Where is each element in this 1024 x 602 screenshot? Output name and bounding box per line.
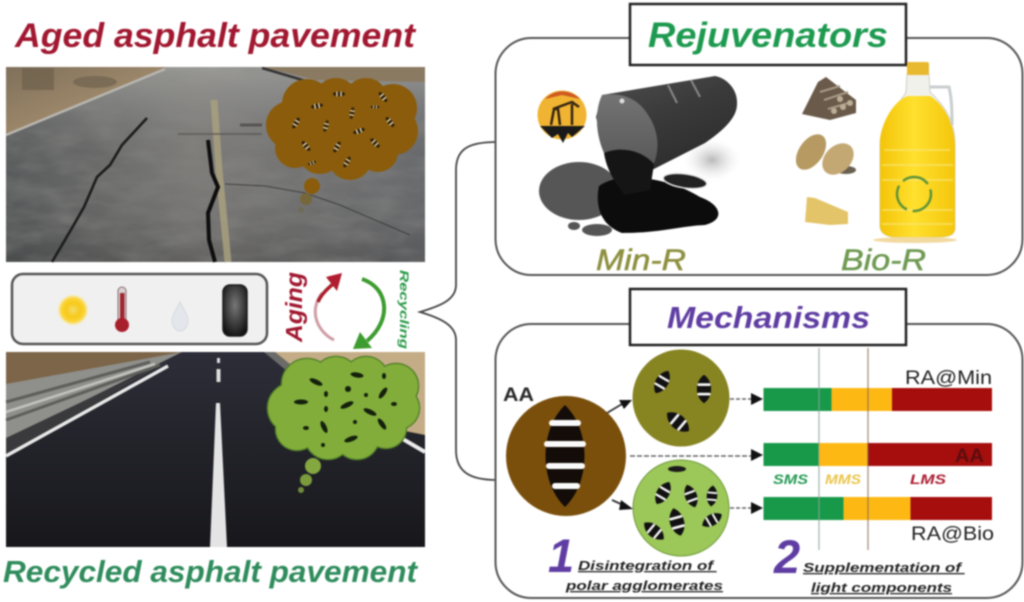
bar: RA@Min <box>764 388 992 411</box>
icon: thermometer <box>115 287 129 332</box>
bracket connector <box>420 142 497 480</box>
label: Bio-R: Bio-R <box>841 244 926 277</box>
arrow: AA to Bio <box>612 500 633 510</box>
heading box: rejuvenators <box>630 4 906 65</box>
step 1 text: Disintegration of <box>578 558 715 573</box>
title: recycled asphalt pavement: Recycled asphalt pavement <box>3 554 419 589</box>
label: Min-R: Min-R <box>596 244 686 277</box>
label: RA@Bio: RA@Bio <box>911 524 994 545</box>
icon: oil pump <box>538 90 586 143</box>
icon: oil bottle <box>873 62 957 243</box>
thought cloud: rejuvenated binder <box>268 357 419 493</box>
heading box: mechanisms <box>630 289 906 345</box>
icon: water drop <box>172 302 188 331</box>
label: aging: Aging <box>281 272 307 343</box>
bar: AA <box>764 443 992 466</box>
step 1 number: 1 <box>548 529 574 582</box>
arrow: AA to AA bar <box>630 449 763 461</box>
bar: RA@Bio <box>764 497 992 520</box>
label: MMS: MMS <box>825 471 862 487</box>
panel: rejuvenators <box>496 4 1022 277</box>
label: RA@Min: RA@Min <box>905 368 992 389</box>
step 2 number: 2 <box>773 530 800 583</box>
arrow: recycling <box>353 279 384 349</box>
circle: mineral rejuvenated <box>632 350 730 446</box>
photo: recycled new road <box>6 352 425 547</box>
label: AA in bar: AA <box>955 446 984 467</box>
step 2 text: Supplementation of <box>803 560 963 575</box>
step 2 text: light components <box>811 580 952 595</box>
photo: aged cracked road <box>6 67 425 262</box>
icon: recycle ring <box>897 177 931 211</box>
label: SMS: SMS <box>773 471 809 487</box>
thought cloud: aged binder with agglomerates <box>266 78 418 213</box>
icon: corn block <box>805 197 848 225</box>
circle: aged asphalt <box>506 396 626 516</box>
icon: tire <box>223 285 247 336</box>
step 1 text: polar agglomerates <box>565 578 723 593</box>
heading box: rejuvenators: Rejuvenators <box>648 16 888 55</box>
label: AA: AA <box>503 385 534 406</box>
title: aged asphalt pavement: Aged asphalt pavement <box>14 17 417 55</box>
arrow: Bio to bar <box>730 502 763 514</box>
icon: wood logs <box>802 77 856 120</box>
label: LMS: LMS <box>910 471 947 487</box>
arrow: aging <box>315 273 342 340</box>
label: recycling: Recycling <box>397 270 411 350</box>
panel: aging factors <box>12 274 267 344</box>
heading box: mechanisms: Mechanisms <box>667 300 870 335</box>
circle: bio rejuvenated <box>633 460 729 556</box>
icon: peanuts <box>790 129 860 181</box>
icon: sun <box>57 294 89 326</box>
guide lines <box>818 348 820 550</box>
arrow: AA to Min <box>607 400 632 413</box>
arrow: Min to bar <box>730 393 763 405</box>
illustration: spilled oil barrel <box>539 76 740 236</box>
panel: mechanisms <box>496 289 1022 598</box>
